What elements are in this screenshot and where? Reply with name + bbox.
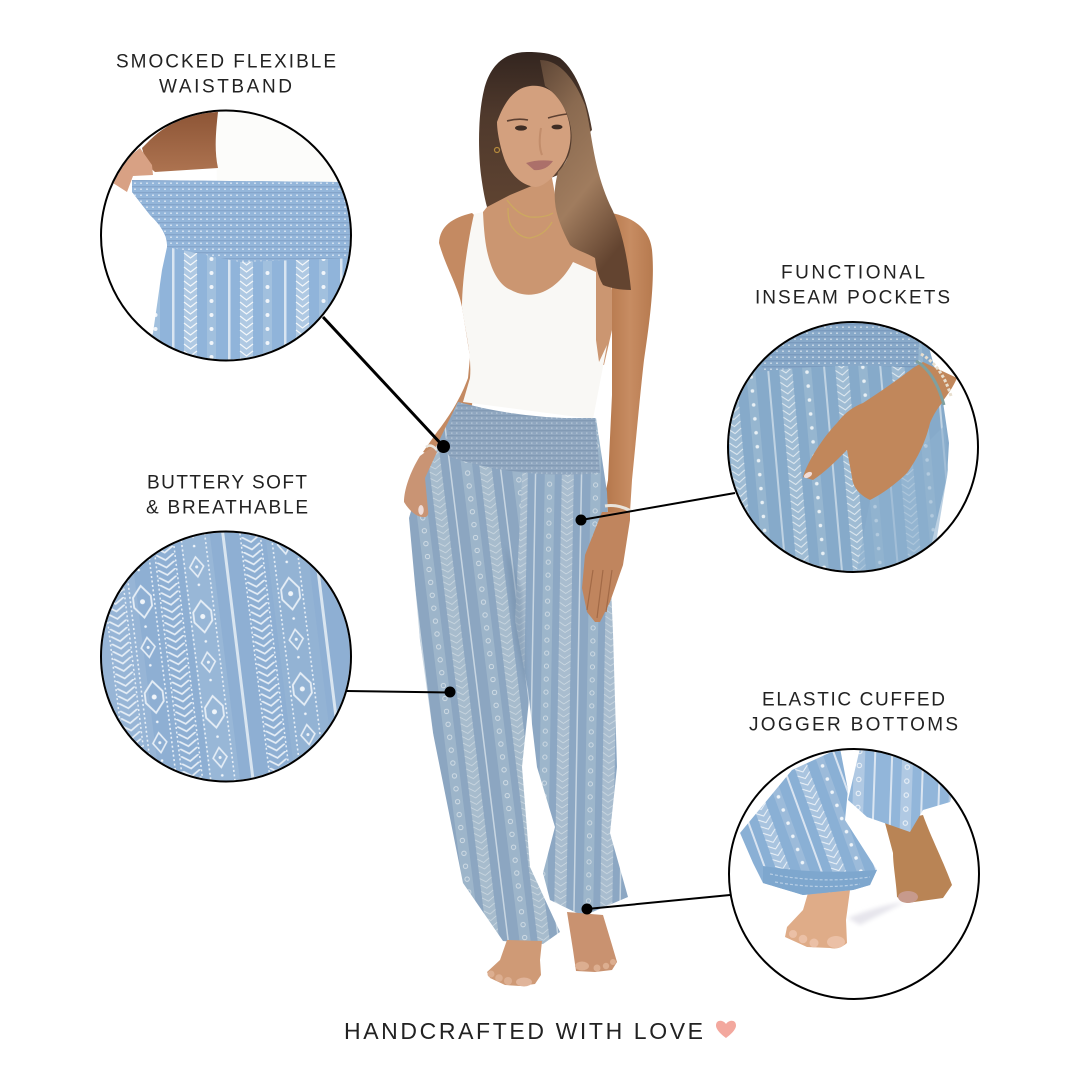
label: ELASTIC CUFFED bbox=[762, 690, 945, 710]
label bbox=[755, 262, 950, 308]
callout: buttery soft and breathable bbox=[100, 475, 456, 782]
marker dot bbox=[582, 904, 592, 914]
circle outline bbox=[728, 322, 978, 572]
detail photo bbox=[729, 323, 956, 571]
face details bbox=[494, 114, 567, 170]
circle outline bbox=[729, 749, 979, 999]
chevron bands bbox=[108, 590, 142, 748]
right foot bbox=[567, 912, 617, 972]
lighter bands bbox=[102, 574, 156, 758]
label: FUNCTIONAL bbox=[781, 262, 925, 284]
detail photo bbox=[114, 112, 350, 360]
callout: smocked flexible waistband bbox=[100, 52, 450, 453]
circle outline bbox=[101, 110, 351, 360]
label bbox=[146, 472, 308, 518]
label bbox=[749, 690, 958, 736]
label: SMOCKED FLEXIBLE bbox=[116, 52, 336, 72]
callout: elastic cuffed jogger bottoms bbox=[582, 690, 981, 1000]
label: & BREATHABLE bbox=[146, 498, 308, 518]
label: BUTTERY SOFT bbox=[147, 472, 307, 494]
circle outline bbox=[101, 532, 351, 782]
label: WAISTBAND bbox=[159, 76, 292, 98]
left foot bbox=[487, 940, 542, 986]
hair back bbox=[479, 52, 592, 207]
detail photo bbox=[102, 532, 350, 780]
necklaces bbox=[507, 200, 553, 238]
marker dot bbox=[444, 686, 456, 698]
face bbox=[497, 86, 571, 187]
left hand bbox=[404, 446, 437, 517]
hair right mass bbox=[540, 60, 631, 290]
white bodysuit bbox=[462, 212, 607, 419]
leader line bbox=[347, 691, 450, 692]
leader line bbox=[323, 317, 443, 446]
callout: functional inseam pockets bbox=[576, 262, 979, 580]
pants left leg bbox=[409, 402, 560, 944]
marker dot bbox=[576, 514, 586, 526]
label bbox=[116, 52, 336, 98]
label: JOGGER BOTTOMS bbox=[749, 714, 958, 736]
right arm bbox=[602, 213, 653, 512]
chest and neck bbox=[480, 178, 612, 365]
leader line bbox=[581, 493, 735, 520]
dotted and plain stripes bbox=[127, 534, 321, 780]
model figure bbox=[404, 52, 653, 986]
marker dot bbox=[437, 440, 450, 453]
right hand bbox=[582, 506, 631, 622]
tagline: HANDCRAFTED WITH LOVE bbox=[344, 1018, 703, 1044]
detail photo bbox=[740, 750, 952, 948]
smocked waistband bbox=[443, 402, 600, 475]
left arm bbox=[423, 213, 490, 458]
crotch shadow bbox=[505, 545, 527, 690]
diamond bands bbox=[132, 568, 168, 762]
icon: heart bbox=[716, 1021, 736, 1038]
label: INSEAM POCKETS bbox=[755, 288, 950, 308]
pants right leg bbox=[515, 418, 628, 916]
leader line bbox=[587, 895, 730, 909]
